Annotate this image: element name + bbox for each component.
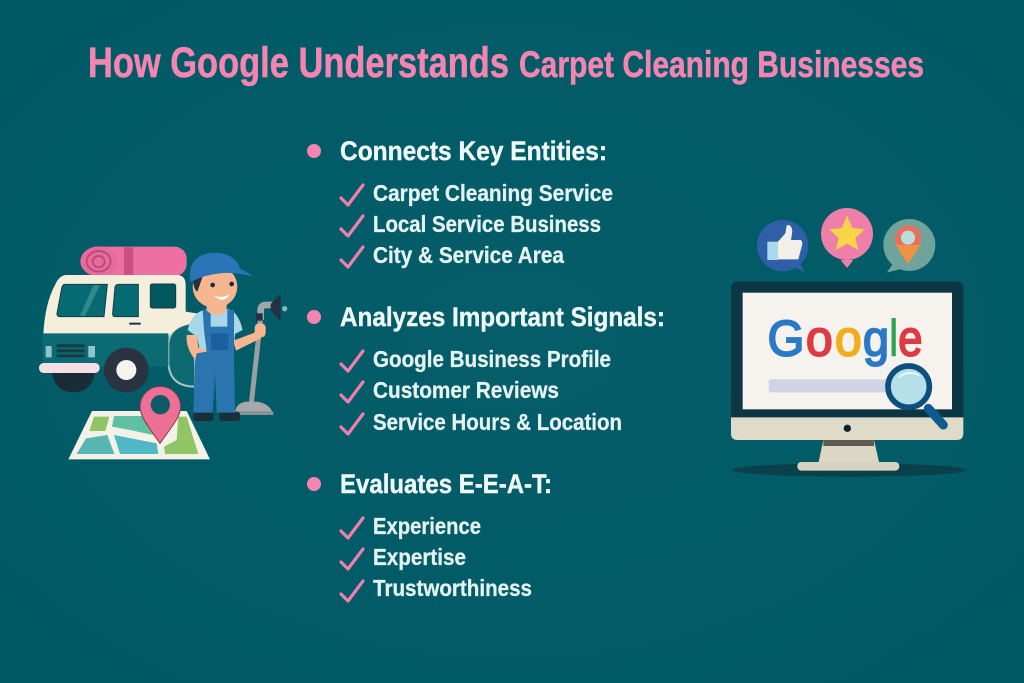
title bbox=[88, 39, 924, 87]
Google logo: l bbox=[890, 311, 897, 367]
list: analyzes important signals: Google Business Profile bbox=[373, 346, 611, 372]
monitor bbox=[731, 282, 967, 477]
title: Carpet Cleaning Businesses bbox=[519, 44, 924, 85]
list: analyzes important signals bbox=[307, 302, 665, 435]
list: evaluates E-E-A-T bbox=[307, 469, 552, 601]
van bbox=[39, 275, 197, 392]
arms bbox=[233, 332, 261, 351]
title: How Google Understands bbox=[88, 39, 509, 87]
list: analyzes important signals: Service Hours & Location bbox=[373, 409, 622, 435]
icon: thumbs up bubble bbox=[757, 220, 808, 273]
Google logo: o bbox=[835, 311, 862, 367]
Google logo: G bbox=[768, 311, 804, 367]
list: evaluates E-E-A-T: Evaluates E-E-A-T: bbox=[340, 469, 552, 499]
illustration: van, cleaner and map bbox=[39, 246, 287, 459]
list: connects key entities: City & Service Area bbox=[373, 242, 564, 268]
list: evaluates E-E-A-T: Experience bbox=[373, 513, 481, 539]
Google logo: g bbox=[863, 311, 889, 367]
Google logo: e bbox=[898, 311, 922, 367]
list: evaluates E-E-A-T: Trustworthiness bbox=[373, 575, 532, 601]
Google logo: o bbox=[806, 311, 833, 367]
carpet roll bbox=[80, 246, 187, 276]
search bar bbox=[769, 379, 902, 392]
shirt bbox=[188, 309, 243, 357]
list: connects key entities: Carpet Cleaning Service bbox=[373, 180, 613, 206]
list: connects key entities: Local Service Business bbox=[373, 211, 601, 237]
list: connects key entities: Connects Key Entities: bbox=[340, 136, 607, 166]
icon: location bubble bbox=[883, 219, 935, 273]
Google logo bbox=[768, 311, 922, 367]
cleaner bbox=[187, 253, 287, 421]
list: analyzes important signals: Customer Reviews bbox=[373, 377, 559, 403]
list: connects key entities bbox=[307, 136, 613, 268]
overalls bbox=[193, 310, 235, 413]
map with pin bbox=[68, 386, 210, 459]
icon: star bubble bbox=[821, 208, 873, 268]
icon: magnifier bbox=[888, 366, 943, 425]
illustration: monitor with Google search bbox=[731, 208, 967, 477]
list: evaluates E-E-A-T: Expertise bbox=[373, 544, 466, 570]
list: analyzes important signals: Analyzes Important Signals: bbox=[340, 302, 665, 332]
